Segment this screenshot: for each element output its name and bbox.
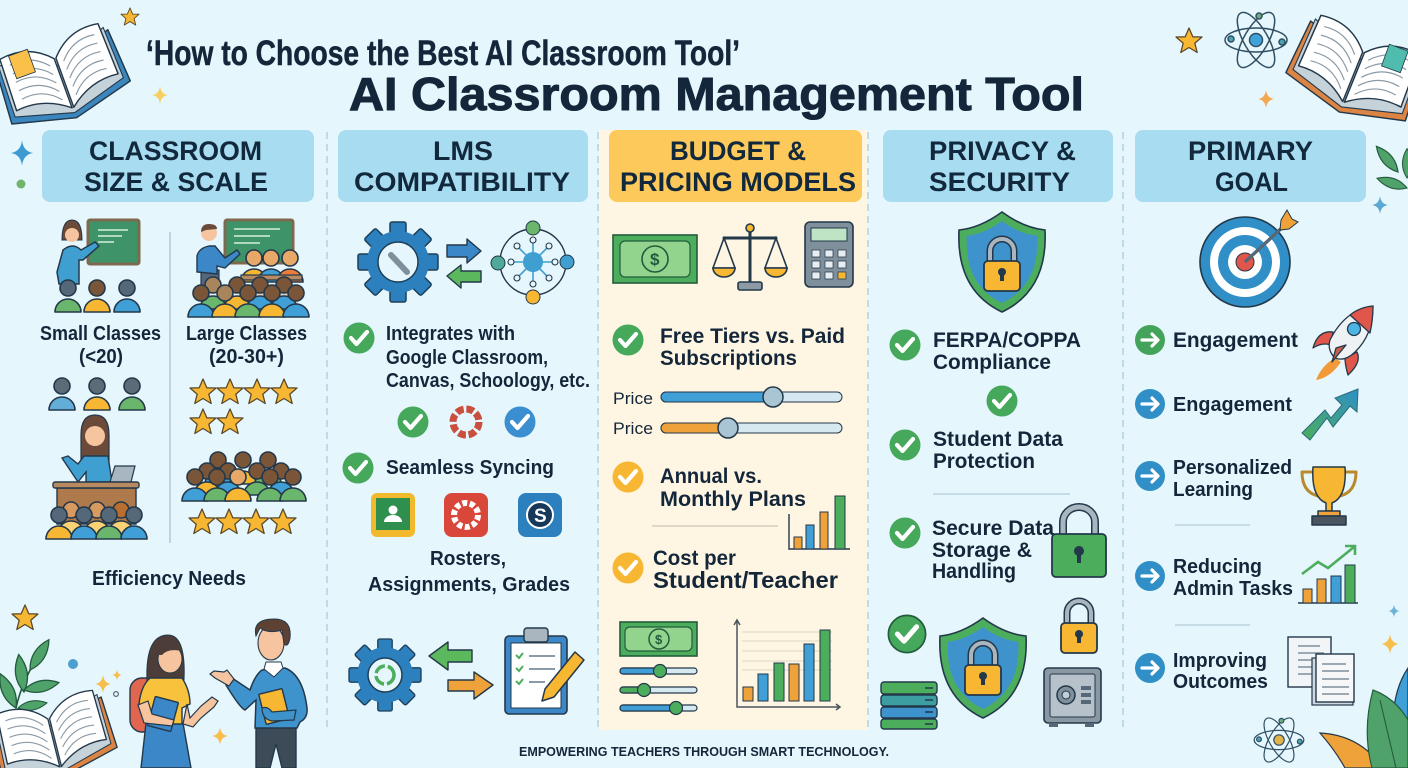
icon: shield with lock lower xyxy=(940,618,1026,718)
heading: privacy and security xyxy=(883,130,1113,202)
arrow bullet: personalized learning xyxy=(1135,461,1165,491)
icon: teacher at desk with students xyxy=(46,415,147,539)
text: improving outcomes: Outcomes xyxy=(1173,671,1268,693)
icon: safe xyxy=(1044,668,1101,727)
check: cost per student xyxy=(612,552,644,584)
slider: price orange xyxy=(613,418,842,438)
label: efficiency needs: Efficiency Needs xyxy=(92,568,246,590)
icon: calculator xyxy=(805,222,853,287)
check: student data xyxy=(890,430,920,460)
heading: budget and pricing models xyxy=(609,130,862,202)
check: free tiers xyxy=(612,324,644,356)
heading: budget and pricing models: PRICING MODELS xyxy=(620,167,856,197)
arrow bullet: improving outcomes xyxy=(1135,653,1165,683)
icon: banknote xyxy=(613,235,697,283)
icon: Schoology xyxy=(518,493,562,537)
footer tagline: EMPOWERING TEACHERS THROUGH SMART TECHNOLOGY. xyxy=(519,744,889,759)
text: free tiers vs paid subscriptions xyxy=(660,325,845,370)
text: cost per student or teacher: Student/Teacher xyxy=(653,567,838,593)
check: integrates xyxy=(344,322,374,354)
icon: small student trio xyxy=(49,378,145,410)
text: annual vs monthly plans xyxy=(660,465,806,511)
text: personalized learning: Learning xyxy=(1173,479,1253,501)
text: improving outcomes: Improving xyxy=(1173,650,1267,672)
check: center xyxy=(986,386,1018,416)
slider: price blue xyxy=(613,387,842,408)
icon: Google Classroom xyxy=(371,493,415,537)
icon: banknote lower xyxy=(620,622,697,656)
decoration: top left book and sparkles xyxy=(0,8,168,189)
heading: LMS compatibility: COMPATIBILITY xyxy=(354,167,570,197)
icon: small bar chart xyxy=(789,496,850,549)
icon: small padlock xyxy=(1061,601,1097,653)
check: secure data xyxy=(890,518,920,548)
arrow bullet: admin tasks xyxy=(1135,561,1165,591)
text: reducing admin tasks xyxy=(1173,556,1293,600)
label: small classes: Small Classes xyxy=(40,323,161,345)
text: secure data storage xyxy=(932,517,1054,583)
text: personalized learning xyxy=(1173,457,1292,501)
check: seamless syncing xyxy=(342,452,374,484)
icon: documents xyxy=(1288,637,1354,705)
decoration: top right atom, star and book xyxy=(1176,7,1408,214)
heading: privacy and security: PRIVACY & xyxy=(929,136,1076,166)
text: integrates with: Google Classroom, xyxy=(386,347,548,369)
text: annual vs monthly plans: Annual vs. xyxy=(660,465,762,488)
text: reducing admin tasks: Admin Tasks xyxy=(1173,578,1293,600)
icon: banknote: $ xyxy=(650,250,660,269)
text: student data protection xyxy=(933,428,1063,473)
heading: privacy and security: SECURITY xyxy=(929,167,1070,197)
text: engagement two: Engagement xyxy=(1173,394,1292,416)
icon: rising arrow xyxy=(1302,389,1358,440)
icon: growth chart xyxy=(1298,546,1358,603)
figure: teacher xyxy=(210,619,307,768)
text: integrates with xyxy=(386,323,590,392)
icon: balance scale xyxy=(713,224,787,290)
heading: classroom size and scale: CLASSROOM xyxy=(89,136,262,166)
text: student data protection: Protection xyxy=(933,450,1035,473)
icon: large shield with lock xyxy=(959,212,1045,312)
label: small classes xyxy=(40,323,161,368)
panel: budget column background xyxy=(599,130,868,730)
text: student data protection: Student Data xyxy=(933,428,1063,451)
text: seamless syncing: Seamless Syncing xyxy=(386,457,554,479)
text: rosters, assignments, grades xyxy=(368,548,570,596)
icon: network hub xyxy=(491,221,574,304)
panel: LMS compatibility xyxy=(334,130,590,726)
heading: primary goal xyxy=(1135,130,1366,202)
text: cost per student or teacher xyxy=(653,547,838,593)
rating stars: large classes xyxy=(190,379,297,434)
text: secure data storage: Handling xyxy=(932,560,1016,583)
chart: rising cost bars xyxy=(734,620,840,710)
icons: small LMS badges xyxy=(398,406,536,438)
icon: exchange arrows lower xyxy=(429,642,493,699)
icon: check badge xyxy=(888,615,926,653)
label: large classes: (20-30+) xyxy=(209,346,284,368)
label: large classes xyxy=(186,323,307,368)
text: FERPA/COPPA compliance: Compliance xyxy=(933,351,1051,374)
check: FERPA xyxy=(890,330,920,360)
icon: server stack xyxy=(881,682,937,729)
icon: large class with teacher at blackboard xyxy=(188,220,309,317)
arrow bullet: engagement two xyxy=(1135,389,1165,419)
check: annual plans xyxy=(612,462,644,492)
text: secure data storage: Storage & xyxy=(932,539,1032,562)
heading: classroom size and scale xyxy=(42,130,314,202)
text: secure data storage: Secure Data xyxy=(932,517,1054,540)
rating stars: crowd xyxy=(189,509,296,534)
label: large classes: Large Classes xyxy=(186,323,307,345)
text: annual vs monthly plans: Monthly Plans xyxy=(660,488,806,511)
figure: student xyxy=(130,635,218,768)
heading: LMS compatibility xyxy=(338,130,588,202)
text: personalized learning: Personalized xyxy=(1173,457,1292,479)
icon: gear with wrench xyxy=(341,205,455,319)
icon: green padlock xyxy=(1052,507,1106,577)
heading: budget and pricing models: BUDGET & xyxy=(670,136,806,166)
icon: budget sliders xyxy=(620,664,697,714)
text: rosters, assignments, grades: Rosters, xyxy=(430,548,506,570)
title: AI Classroom Management Tool xyxy=(349,68,1084,120)
icon: banknote lower: $ xyxy=(655,632,663,647)
text: rosters, assignments, grades: Assignments, Grades xyxy=(368,574,570,596)
heading: primary goal: PRIMARY xyxy=(1188,136,1313,166)
panel: budget and pricing models xyxy=(609,130,862,714)
slider: price blue: Price xyxy=(613,389,653,408)
label: small classes: (<20) xyxy=(79,346,123,368)
icon: small class with teacher at blackboard xyxy=(55,220,140,312)
text: free tiers vs paid subscriptions: Free Tiers vs. Paid xyxy=(660,325,845,348)
icon: rocket xyxy=(1313,306,1373,380)
panel: primary goal xyxy=(1135,130,1373,705)
illustration: bottom left plant and book xyxy=(0,605,122,768)
text: FERPA/COPPA compliance xyxy=(933,329,1081,374)
text: engagement: Engagement xyxy=(1173,329,1298,352)
arrow bullet: engagement xyxy=(1135,325,1165,355)
text: integrates with: Canvas, Schoology, etc. xyxy=(386,370,590,392)
text: integrates with: Integrates with xyxy=(386,323,515,345)
heading: LMS compatibility: LMS xyxy=(433,136,493,166)
icon: target with arrow xyxy=(1200,210,1298,307)
title xyxy=(146,34,1084,120)
icon: clipboard and pencil xyxy=(505,628,584,714)
text: free tiers vs paid subscriptions: Subscriptions xyxy=(660,347,797,370)
icon: exchange arrows xyxy=(447,239,481,288)
slider: price orange: Price xyxy=(613,419,653,438)
panel: privacy and security xyxy=(881,130,1113,729)
heading: primary goal: GOAL xyxy=(1215,167,1288,197)
icon: Canvas xyxy=(444,493,488,537)
icon: sync gear xyxy=(334,624,436,726)
title: ‘How to Choose the Best AI Classroom Tool’ xyxy=(146,34,740,73)
illustration: student and teacher talking xyxy=(130,619,307,768)
column dividers xyxy=(327,132,1123,730)
text: cost per student or teacher: Cost per xyxy=(653,547,736,570)
icon: Schoology: S xyxy=(534,506,547,527)
heading: classroom size and scale: SIZE & SCALE xyxy=(84,167,268,197)
text: improving outcomes xyxy=(1173,650,1268,693)
panel: classroom size and scale xyxy=(40,130,314,590)
icon: crowd of students xyxy=(182,452,306,501)
decoration: bottom right atom and foliage xyxy=(1254,605,1408,768)
icon: trophy xyxy=(1302,467,1356,525)
text: reducing admin tasks: Reducing xyxy=(1173,556,1262,578)
text: FERPA/COPPA compliance: FERPA/COPPA xyxy=(933,329,1081,352)
